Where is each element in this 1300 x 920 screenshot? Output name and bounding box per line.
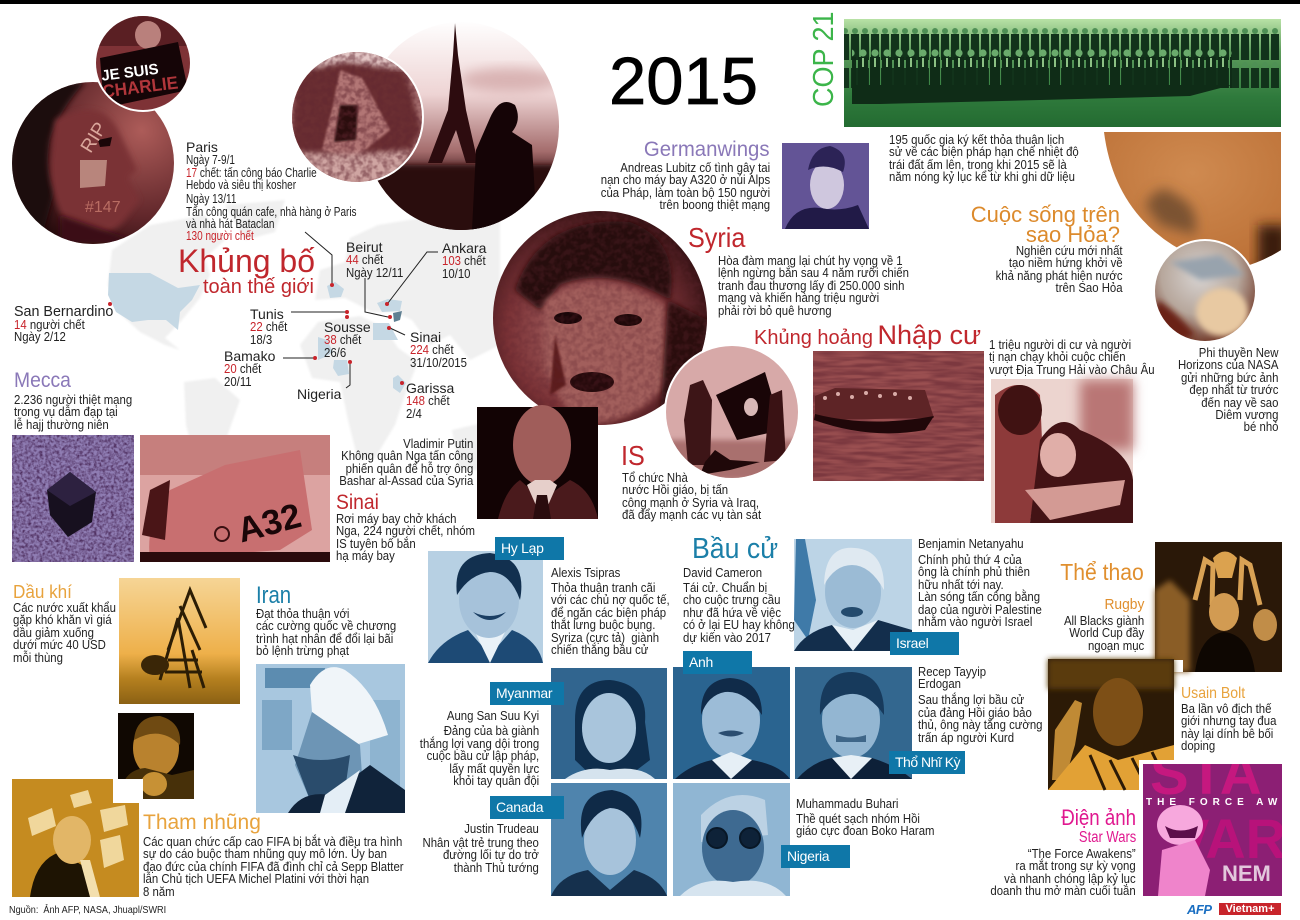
heading: Khủng hoảng Nhập cư: Khủng hoảng Nhập cư (754, 320, 981, 350)
photo: Star Wars poster (1139, 760, 1282, 896)
text: Sinai: Nga, 224 người chết, nhóm (336, 524, 475, 538)
text: Tsipras: chiến thắng bầu cử (551, 643, 648, 657)
text: COP 21: sử về các biện pháp hạn chế nhiệt độ (889, 145, 1079, 159)
text: Syria: mạng và khiến hàng triệu người (718, 291, 879, 305)
text: Tham nhũng: 8 năm (143, 885, 175, 899)
text: Trudeau: thành Thủ tướng (454, 861, 539, 875)
heading: Điện ảnh: Điện ảnh (1061, 805, 1136, 830)
tag: Thổ Nhĩ Kỳ: Thổ Nhĩ Kỳ (895, 754, 960, 770)
tag: Hy Lạp (495, 537, 564, 560)
text: Paris: 130 người chết (186, 229, 254, 243)
text: Paris: Hebdo và siêu thị kosher (186, 178, 296, 192)
label: Sousse: Sousse (324, 319, 371, 335)
photo: RIP face (12, 82, 174, 244)
text: Iran: các cường quốc về chương (256, 619, 396, 633)
text: Mecca: 2.236 người thiệt mạng (14, 393, 132, 407)
tag: Thổ Nhĩ Kỳ (889, 751, 965, 774)
text: Netanyahu: dao của người Palestine (918, 603, 1042, 617)
heading: Germanwings: Germanwings (644, 138, 770, 161)
photo: COP21 leaders (844, 19, 1281, 127)
text: New Horizons: Phi thuyền New (1198, 346, 1278, 360)
photo: Star Wars poster: NEM (1222, 861, 1271, 886)
text: Syria: lệnh ngừng bắn sau 4 năm rưỡi chiến (718, 266, 909, 280)
text: Trudeau (423, 822, 539, 875)
text: Cameron: dự kiến vào 2017 (683, 631, 771, 645)
text: Cameron (683, 566, 795, 645)
text: Netanyahu: nhằm vào người Israel (918, 615, 1032, 629)
tag: Canada (490, 796, 564, 819)
text: Dầu khí: dưới mức 40 USD (13, 638, 106, 652)
label: Sinai: 31/10/2015 (410, 356, 467, 370)
text: Tham nhũng: lẫn Chủ tịch UEFA Michel Platini với thời hạn (143, 872, 369, 886)
photo: A320 wreckage (140, 435, 330, 562)
photo: Rouhani of Iran (256, 664, 405, 813)
text: Netanyahu: hữu nhất tới nay. (918, 578, 1004, 592)
text: Suu Kyi: lấy mất quyền lực (449, 762, 539, 776)
subheading: Star Wars: Star Wars (1079, 829, 1136, 846)
photo: Platini (118, 713, 194, 799)
text: Paris: 17 chết: tấn công báo Charlie (186, 166, 317, 180)
text: Usain Bolt: giới nhưng tay đua (1181, 714, 1276, 728)
text: Paris: Ngày 13/11 (186, 192, 236, 206)
photo: Kaaba in Mecca (12, 435, 134, 562)
photo: Je suis Charlie: JE SUIS (100, 61, 160, 85)
label: Beirut: Beirut (346, 239, 383, 255)
text: Tsipras: thắt lưng buộc bụng. (551, 618, 655, 632)
photo: woman laying flowers (290, 50, 424, 184)
text: Dầu khí: mỗi thùng (13, 651, 63, 665)
text: Mecca (14, 393, 132, 432)
text: Mars: trên Sao Hỏa (1056, 281, 1123, 295)
text: migrants: vượt Địa Trung Hải vào Châu Âu (989, 363, 1155, 377)
photo: Star Wars poster: VAR (1172, 807, 1286, 870)
text: Tham nhũng (143, 834, 404, 899)
label: Ankara: Ankara (442, 240, 486, 256)
label: Garissa: 148 chết (406, 394, 450, 408)
heading: IS: IS (621, 440, 645, 471)
text: IS: Tổ chức Nhà (622, 471, 688, 485)
photo: Syrian boy (490, 208, 712, 430)
label: Sinai (410, 329, 467, 370)
photo: Tsipras (428, 551, 543, 663)
text: Putin: Vladimir Putin (403, 437, 473, 451)
heading: Dầu khí: Dầu khí (13, 582, 72, 602)
heading: Cuộc sống trên sao Hỏa (971, 202, 1120, 247)
text: New Horizons: bé nhỏ (1243, 420, 1278, 434)
text: Tsipras: với các chủ nợ quốc tế, (551, 593, 670, 607)
tag: Nigeria (781, 845, 850, 868)
text: Germanwings (601, 161, 770, 212)
photo: A320 wreckage: A32 (233, 496, 305, 550)
text: Star Wars: doanh thu mở màn cuối tuần (991, 884, 1136, 898)
text: Sinai: Rơi máy bay chở khách (336, 512, 457, 526)
text: Tham nhũng: Các quan chức cấp cao FIFA bị bắt và điều tra hình (143, 835, 402, 849)
subheading: Usain Bolt: Usain Bolt (1181, 685, 1245, 702)
text: Erdogan (918, 665, 1042, 745)
subheading: toàn thế giới: toàn thế giới (203, 276, 314, 298)
text: Syria: phải rời bỏ quê hương (718, 304, 832, 318)
text: Dầu khí: Các nước xuất khẩu (13, 601, 116, 615)
text: Cameron: có ở lại EU hay không (683, 618, 795, 632)
heading: Mecca: Mecca (14, 369, 71, 392)
text: Erdogan: Recep Tayyip (918, 665, 986, 679)
photo: All Blacks with trophy (1155, 542, 1282, 672)
text: Putin: phiến quân để hỗ trợ ông (345, 462, 473, 476)
text: Paris: và nhà hát Bataclan (186, 217, 274, 231)
logo: Vietnam+: Vietnam+ (1225, 903, 1275, 915)
text: Dầu khí: dầu giảm xuống (13, 626, 94, 640)
map location dots (108, 283, 404, 385)
text: Star Wars (990, 847, 1136, 898)
subheading: Rugby: Rugby (1104, 596, 1144, 613)
text: COP 21: 195 quốc gia ký kết thỏa thuận lịch (889, 133, 1064, 147)
text: Erdogan: Erdogan (918, 677, 961, 691)
text: Netanyahu: Benjamin Netanyahu (918, 537, 1024, 551)
world map background (108, 200, 500, 520)
text: New Horizons: Horizons của NASA (1177, 358, 1278, 372)
text: Paris: Paris (186, 139, 218, 155)
text: Tsipras: Syriza (cực tả) giành (551, 631, 659, 645)
text: Star Wars: và nhanh chóng lập kỷ lục (1004, 872, 1136, 886)
text: Netanyahu (918, 537, 1042, 629)
tag: Israel: Israel (896, 635, 928, 651)
text: New Horizons: Diêm vương (1215, 408, 1278, 422)
text: Germanwings: Andreas Lubitz cố tình gây tai (620, 161, 770, 175)
text: Iran: bỏ lệnh trừng phạt (256, 644, 349, 658)
heading: Syria: Syria (688, 222, 745, 253)
text: Buhari: Muhammadu Buhari (796, 797, 898, 811)
photo: IS fighters with flag (664, 344, 800, 480)
text: Trudeau: Nhân vật trẻ trung theo (423, 836, 539, 850)
text: New Horizons (1177, 346, 1278, 434)
title: 2015: 2015 (609, 44, 758, 119)
label: Nigeria: Nigeria (297, 386, 341, 402)
text: Star Wars: ra mắt trong sự kỳ vọng (1016, 859, 1136, 873)
label: San Bernardino: Ngày 2/12 (14, 330, 66, 344)
text: Usain Bolt: này lại dính bê bối (1181, 727, 1273, 741)
text: Tham nhũng: đạo đức của chính FIFA đã đình chỉ cả Sepp Blatter (143, 860, 404, 874)
photo: Eiffel tower and woman (378, 23, 559, 230)
text: Syria: Hòa đàm mang lại chút hy vọng về 1 (718, 254, 903, 268)
text: Cameron: Tái cử. Chuẩn bị (683, 581, 767, 595)
text: Rugby: World Cup đầy (1069, 626, 1144, 640)
text: Tham nhũng: sự do cáo buộc tham nhũng quy mô lớn. Ủy ban (143, 847, 387, 861)
heading: Cuộc sống trên sao Hỏa: Cuộc sống trên (971, 202, 1120, 227)
text: Suu Kyi: Aung San Suu Kyi (447, 709, 539, 723)
text: Trudeau: Justin Trudeau (464, 822, 539, 836)
label: Garissa: 2/4 (406, 407, 422, 421)
label: Sinai: 224 chết (410, 343, 454, 357)
text: Syria: tranh đau thương lấy đi 250.000 sinh (718, 279, 904, 293)
text: Sinai: hạ máy bay (336, 549, 395, 563)
label: Tunis: 22 chết (250, 320, 287, 334)
photo: RIP face: #147 (85, 199, 121, 216)
text: Suu Kyi (420, 709, 539, 788)
tag: Myanmar (490, 682, 564, 705)
text: Germanwings: trên boong thiệt mạng (659, 198, 770, 212)
highlighted countries on map (108, 273, 406, 393)
tag: Canada: Canada (496, 799, 543, 815)
text: Cameron: như đã hứa về việc (683, 606, 781, 620)
tag: Anh (683, 651, 752, 674)
text: New Horizons: đến nay về sao (1201, 396, 1278, 410)
text: Iran: Đạt thỏa thuận với (256, 607, 349, 621)
text: Syria (718, 254, 909, 318)
text: Dầu khí (13, 601, 116, 665)
photo: Germanwings pilot (782, 143, 869, 229)
text: Netanyahu: Làn sóng tấn công bằng (918, 590, 1040, 604)
text: Mecca: lễ hajj thường niên (14, 418, 109, 432)
text: New Horizons: gửi những bức ảnh (1181, 371, 1278, 385)
photo: Je suis Charlie (94, 14, 192, 112)
text: Netanyahu: ông là chính phủ thiên (918, 565, 1030, 579)
heading: COP 21: COP 21 (808, 12, 840, 107)
label: Bamako: Bamako (224, 348, 275, 364)
text: Mars (996, 244, 1123, 295)
label: Bamako (224, 348, 275, 389)
tag: Hy Lạp: Hy Lạp (501, 540, 544, 556)
label: Ankara: 103 chết (442, 254, 486, 268)
text: Cameron: cho cuộc trưng cầu (683, 593, 780, 607)
photo: Putin (477, 405, 598, 519)
text: COP 21: trái đất ấm lên, trong khi 2015 sẽ là (889, 158, 1067, 172)
text: Erdogan: của đảng Hồi giáo bảo (918, 706, 1032, 720)
heading: Iran: Iran (256, 582, 291, 609)
label: Sousse (324, 319, 371, 360)
label: Beirut: Ngày 12/11 (346, 266, 403, 280)
heading: Tham nhũng: Tham nhũng (143, 811, 261, 834)
photo: migrant boat (813, 351, 984, 481)
heading: Thể thao: Thể thao (1060, 559, 1144, 585)
label: Sousse: 38 chết (324, 333, 361, 347)
text: Mars: tạo niềm hứng khởi về (1009, 256, 1123, 270)
text: Paris (186, 139, 357, 243)
label: Sousse: 26/6 (324, 346, 346, 360)
label: Garissa (406, 380, 454, 421)
label: San Bernardino: 14 người chết (14, 318, 85, 332)
text: Putin: Không quân Nga tấn công (341, 449, 473, 463)
label: Tunis: 18/3 (250, 333, 272, 347)
heading: Sinai: Sinai (336, 491, 379, 514)
text: IS: nước Hồi giáo, bị tấn (622, 483, 728, 497)
photo: Mars (1104, 132, 1288, 270)
heading: Bầu cử: Bầu cử (692, 533, 778, 565)
text: Tsipras: để ngăn các biện pháp (551, 606, 666, 620)
label: Beirut: 44 chết (346, 253, 383, 267)
text: Suu Kyi: khỏi tay quân đội (453, 774, 539, 788)
text: Iran (256, 607, 396, 658)
photo: RIP face: RIP (77, 119, 112, 157)
heading: Khủng bố: Khủng bố (178, 243, 315, 279)
photo: Netanyahu (794, 539, 912, 651)
label: Bamako: 20 chết (224, 362, 261, 376)
photo: Erdogan (795, 667, 912, 779)
text: Tsipras: Thỏa thuận tranh cãi (551, 581, 655, 595)
photo: Je suis Charlie: CHARLIE (101, 72, 179, 102)
text: Suu Kyi: thắng lợi vang dội trong (420, 737, 539, 751)
text: Sinai: IS tuyên bố bắn (336, 537, 416, 551)
text: Buhari: giáo cực đoan Boko Haram (796, 824, 935, 838)
photo: Trudeau (551, 783, 667, 896)
text: Mars: khả năng phát hiện nước (996, 269, 1123, 283)
text: New Horizons: đẹp nhất từ trước (1189, 383, 1278, 397)
label: Garissa: Garissa (406, 380, 454, 396)
text: Mecca: trong vụ dẫm đạp tại (14, 405, 118, 419)
label: Bamako: 20/11 (224, 375, 252, 389)
text: Tsipras (551, 566, 670, 657)
text: Paris: Ngày 7-9/1 (186, 153, 235, 167)
photo: David Cameron (673, 667, 790, 779)
label: Ankara: 10/10 (442, 267, 470, 281)
photo: Blatter with banknotes (12, 779, 143, 897)
tag: Israel (890, 632, 959, 655)
text: IS: công mạnh ở Syria và Iraq, (622, 496, 759, 510)
map leader lines (283, 232, 438, 388)
photo: Usain Bolt (1048, 659, 1174, 790)
text: Putin (339, 437, 474, 488)
photo: Aung San Suu Kyi (551, 668, 667, 779)
text: Rugby: ngoạn mục (1088, 639, 1144, 653)
text: COP 21: năm nóng kỷ lục kể từ khi ghi dữ liệu (889, 170, 1075, 184)
text: migrants: tị nạn chạy khỏi cuộc chiến (989, 350, 1126, 364)
text: Erdogan: Sau thắng lợi bầu cử (918, 693, 1024, 707)
photo: Star Wars poster: STA (1150, 742, 1262, 807)
text: Putin: Bashar al-Assad của Syria (339, 474, 473, 488)
tag: Myanmar: Myanmar (496, 685, 552, 701)
text: COP 21 (889, 133, 1079, 184)
text: migrants (989, 338, 1155, 377)
heading: Cuộc sống trên sao Hỏa: sao Hỏa? (1026, 222, 1120, 247)
logo: AFP: AFP (1187, 902, 1212, 917)
text: Suu Kyi: cuộc bầu cử lập pháp, (426, 749, 539, 763)
text: Dầu khí: gặp khó khăn vì giá (13, 613, 112, 627)
photo: refugees embracing (991, 379, 1133, 523)
text: Erdogan: thủ, ông này tăng cường (918, 718, 1042, 732)
text: Rugby: All Blacks giành (1064, 614, 1144, 628)
text: Usain Bolt (1181, 702, 1276, 753)
label: Tunis (250, 306, 288, 347)
text: Cameron: David Cameron (683, 566, 762, 580)
text: Buhari: Thề quét sạch nhóm Hồi (796, 812, 920, 826)
tag: Anh: Anh (689, 654, 713, 670)
text: Star Wars: “The Force Awakens” (1028, 847, 1136, 861)
text: Tsipras: Alexis Tsipras (551, 566, 620, 580)
text: Iran: trình hạt nhân để đổi lại bãi (256, 632, 393, 646)
text: Germanwings: của Pháp, làm toàn bộ 150 người (601, 186, 770, 200)
top black bar (0, 0, 1300, 4)
label: Beirut (346, 239, 403, 280)
text: IS: đã đẩy mạnh các vụ tàn sát (622, 508, 761, 522)
label: San Bernardino: San Bernardino (14, 304, 113, 320)
label: Sinai: Sinai (410, 329, 441, 345)
text: Suu Kyi: Đảng của bà giành (443, 724, 539, 738)
text: IS (622, 471, 762, 522)
label: Tunis: Tunis (250, 306, 284, 322)
text: Mars: Nghiên cứu mới nhất (1016, 244, 1123, 258)
text: migrants: 1 triệu người di cư và người (989, 338, 1131, 352)
tag: Nigeria: Nigeria (787, 848, 829, 864)
photo: Star Wars poster: THE FORCE AW (1146, 797, 1282, 808)
text: Trudeau: đường lối tự do trở (443, 848, 539, 862)
text: Sinai (336, 512, 475, 563)
text: Netanyahu: Chính phủ thứ 4 của (918, 553, 1022, 567)
text: Rugby (1064, 614, 1144, 653)
photo: oil pumpjack (119, 578, 240, 704)
text: Paris: Tấn công quán cafe, nhà hàng ở Paris (186, 205, 357, 219)
text: Erdogan: trấn áp người Kurd (918, 731, 1014, 745)
text: Germanwings: nạn cho máy bay A320 ở núi Alps (601, 173, 770, 187)
label: Ankara (442, 240, 486, 281)
text: Usain Bolt: doping (1181, 739, 1215, 753)
label: San Bernardino (14, 304, 113, 344)
text: Buhari (796, 797, 935, 838)
photo: Pluto (1152, 239, 1257, 345)
source note: Nguồn: Ảnh AFP, NASA, Jhuapl/SWRI (9, 905, 166, 916)
text: Usain Bolt: Ba lần vô địch thế (1181, 702, 1271, 716)
photo: Buhari (673, 783, 790, 896)
